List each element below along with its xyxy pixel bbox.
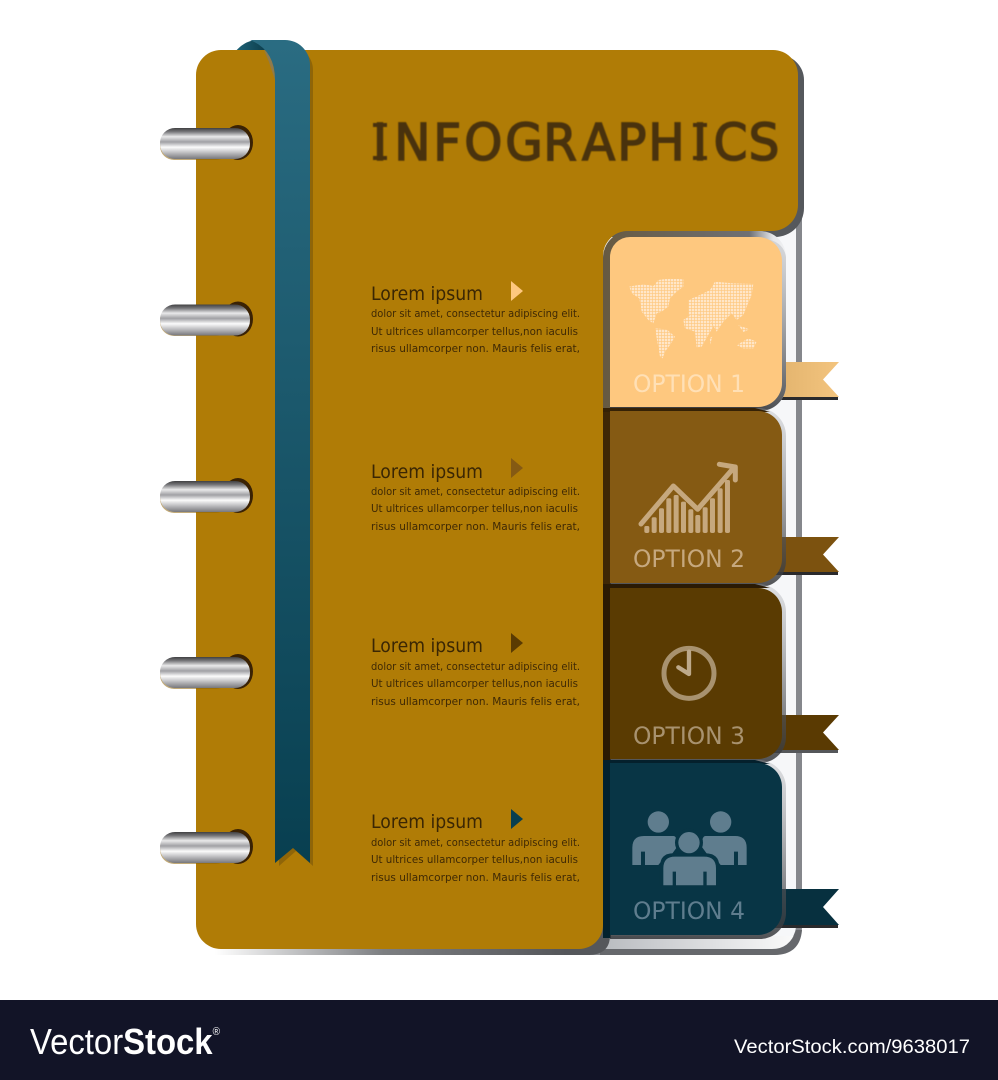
text block 2: Lorem ipsum bbox=[371, 461, 483, 483]
spiral ring 2 bbox=[160, 302, 253, 336]
text block 4: Lorem ipsum bbox=[371, 811, 483, 833]
label: option 3: OPTION 3 bbox=[633, 722, 745, 750]
spiral ring 3 bbox=[160, 478, 253, 513]
ribbon tab 4 bbox=[773, 889, 839, 928]
label: option 4: OPTION 4 bbox=[633, 897, 745, 925]
spiral ring 4 bbox=[160, 654, 253, 689]
panel: option 3 bbox=[603, 584, 786, 763]
text block 2: dolor sit amet, consectetur adipiscing elit. bbox=[371, 485, 580, 498]
text block 1: Lorem ipsum bbox=[371, 283, 483, 305]
text block 1: dolor sit amet, consectetur adipiscing elit. bbox=[371, 307, 580, 320]
arrow 3 bbox=[511, 633, 523, 653]
icon: dotted world map bbox=[629, 278, 757, 358]
text block 1 bbox=[371, 281, 580, 355]
text block 1: Ut ultrices ullamcorper tellus,non iaculis bbox=[371, 325, 578, 338]
icon: clock bbox=[664, 648, 714, 698]
text block 3: Lorem ipsum bbox=[371, 635, 483, 657]
text block 3: dolor sit amet, consectetur adipiscing elit. bbox=[371, 660, 580, 673]
text block 4: Ut ultrices ullamcorper tellus,non iaculis bbox=[371, 853, 578, 866]
text block 1: risus ullamcorper non. Mauris felis erat, bbox=[371, 342, 580, 355]
panel: option 1 bbox=[603, 231, 786, 411]
footer logo: ® bbox=[213, 1026, 220, 1038]
text block 3: risus ullamcorper non. Mauris felis erat, bbox=[371, 695, 580, 708]
bookmark ribbon bbox=[250, 40, 313, 866]
footer logo: VectorStock bbox=[30, 1021, 221, 1062]
text block 4 bbox=[371, 809, 580, 884]
spiral ring 1 bbox=[160, 125, 253, 160]
footer bar bbox=[0, 1000, 998, 1080]
title: INFOGRAPHICS bbox=[373, 113, 779, 172]
footer url: VectorStock.com/9638017 bbox=[734, 1036, 970, 1058]
spiral ring 5 bbox=[160, 829, 253, 864]
arrow 1 bbox=[511, 281, 523, 301]
text block 2: risus ullamcorper non. Mauris felis erat, bbox=[371, 520, 580, 533]
text block 4: dolor sit amet, consectetur adipiscing elit. bbox=[371, 836, 580, 849]
text block 2 bbox=[371, 458, 580, 533]
bookmark ribbon back loop bbox=[235, 40, 276, 60]
notebook pages bbox=[215, 90, 802, 955]
ribbon tab 1 bbox=[773, 362, 839, 400]
text block 3 bbox=[371, 633, 580, 708]
label: option 2: OPTION 2 bbox=[633, 545, 745, 573]
text block 4: risus ullamcorper non. Mauris felis erat, bbox=[371, 871, 580, 884]
text block 2: Ut ultrices ullamcorper tellus,non iaculis bbox=[371, 502, 578, 515]
icon: rising line chart bbox=[641, 464, 735, 533]
ribbon tab 2 bbox=[773, 537, 839, 575]
icon: group of people bbox=[632, 811, 747, 886]
label: option 1: OPTION 1 bbox=[633, 370, 745, 398]
panel: option 2 bbox=[603, 408, 786, 587]
notebook cover bbox=[196, 50, 798, 949]
cover shadow bbox=[215, 55, 804, 955]
panel: option 4 bbox=[603, 760, 786, 939]
arrow 4 bbox=[511, 809, 523, 829]
ribbon tab 3 bbox=[773, 715, 839, 753]
arrow 2 bbox=[511, 458, 523, 478]
text block 3: Ut ultrices ullamcorper tellus,non iaculis bbox=[371, 677, 578, 690]
